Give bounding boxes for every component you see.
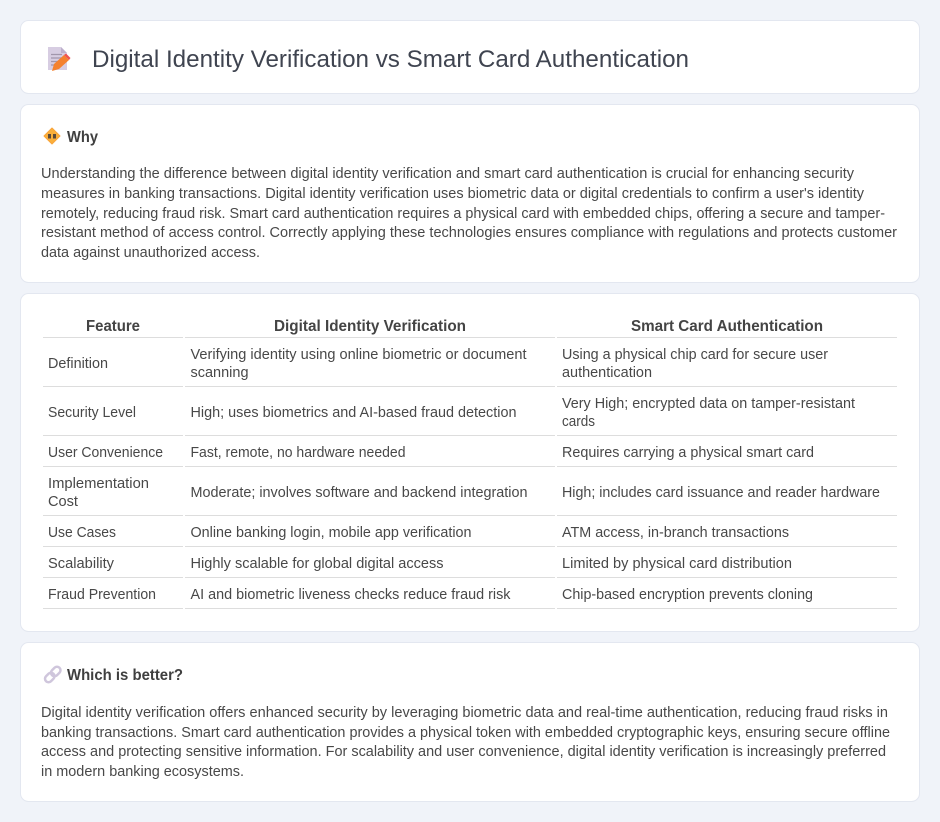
row: user convenience: Requires carrying a physical smart card	[562, 445, 814, 461]
row: scalability: Scalability	[48, 556, 115, 572]
table header: Feature	[86, 318, 140, 335]
text block: which is better: in modern banking ecosystems.	[41, 764, 244, 780]
row: implementation cost	[43, 476, 897, 516]
row: fraud prevention: AI and biometric liveness checks reduce fraud risk	[190, 587, 511, 603]
text block: which is better: Digital identity verification offers enhanced security by leveraging biometric data and real-time authentication, reducing fraud risks in	[41, 705, 888, 721]
row: scalability: Highly scalable for global digital access	[190, 556, 444, 572]
text block: why: data against unauthorized access.	[41, 245, 260, 261]
row: use cases: Online banking login, mobile app verification	[190, 525, 472, 541]
text block: which is better: access and protecting sensitive information. For scalability and user convenience, digital identity verification is increasingly preferred	[41, 744, 886, 760]
row: use cases: ATM access, in-branch transactions	[562, 525, 789, 541]
text block: why: remotely, reducing fraud risk. Smart card authentication requires a physical card with embedded chips, offering a secure and tamper-	[41, 206, 885, 222]
row: definition: authentication	[562, 365, 652, 381]
row: user convenience: User Convenience	[48, 445, 163, 461]
row: security level	[43, 396, 897, 436]
title: Digital Identity Verification vs Smart Card Authentication	[92, 46, 689, 73]
heading: why: Why	[67, 129, 98, 146]
row: fraud prevention: Chip-based encryption prevents cloning	[562, 587, 813, 603]
row: user convenience	[43, 445, 897, 467]
row: definition: Using a physical chip card for secure user	[562, 347, 828, 363]
row: user convenience: Fast, remote, no hardware needed	[190, 445, 406, 461]
row: definition	[43, 347, 897, 387]
row: fraud prevention: Fraud Prevention	[48, 587, 156, 603]
row: scalability: Limited by physical card distribution	[562, 556, 792, 572]
heading: which is better: Which is better?	[67, 667, 183, 684]
row: use cases	[43, 525, 897, 547]
row: definition: scanning	[190, 365, 248, 381]
row: security level: High; uses biometrics and AI-based fraud detection	[190, 405, 516, 421]
panel: header	[20, 20, 920, 94]
text block: which is better: banking transactions. Smart card authentication provides a physical token with embedded cryptographic keys, ensuring secure offline	[41, 725, 890, 741]
panel: which is better	[20, 642, 920, 802]
row: implementation cost: High; includes card issuance and reader hardware	[562, 485, 880, 501]
row: definition: Definition	[48, 356, 108, 372]
row: scalability	[43, 556, 897, 578]
row: definition: Verifying identity using online biometric or document	[190, 347, 526, 363]
icon: diamond sign	[44, 128, 60, 144]
table header: Digital Identity Verification	[274, 318, 466, 335]
text block: why: resistant method of access control. Correctly applying these technologies ensures compliance with regulations and protects customer	[41, 225, 897, 241]
text block: why: measures in banking transactions. Digital identity verification uses biometric data or digital credentials to confirm a user's identity	[41, 186, 865, 202]
row: security level: Very High; encrypted data on tamper-resistant	[562, 396, 855, 412]
row: implementation cost: Moderate; involves software and backend integration	[190, 485, 528, 501]
row: security level: cards	[562, 414, 595, 430]
panel: why	[20, 104, 920, 282]
row: use cases: Use Cases	[48, 525, 116, 541]
text block: why	[41, 166, 897, 261]
row: implementation cost: Cost	[48, 494, 78, 510]
text block: why: Understanding the difference between digital identity verification and smart card authentication is crucial for enhancing security	[41, 166, 855, 182]
panel: comparison table	[20, 294, 920, 632]
row: implementation cost: Implementation	[48, 476, 149, 492]
table header	[43, 318, 897, 338]
text block: which is better	[41, 705, 890, 780]
row: security level: Security Level	[48, 405, 136, 421]
icon: chain link	[44, 665, 62, 684]
table header: Smart Card Authentication	[631, 318, 823, 335]
row: fraud prevention	[43, 587, 897, 609]
icon: document with pencil	[48, 47, 70, 71]
